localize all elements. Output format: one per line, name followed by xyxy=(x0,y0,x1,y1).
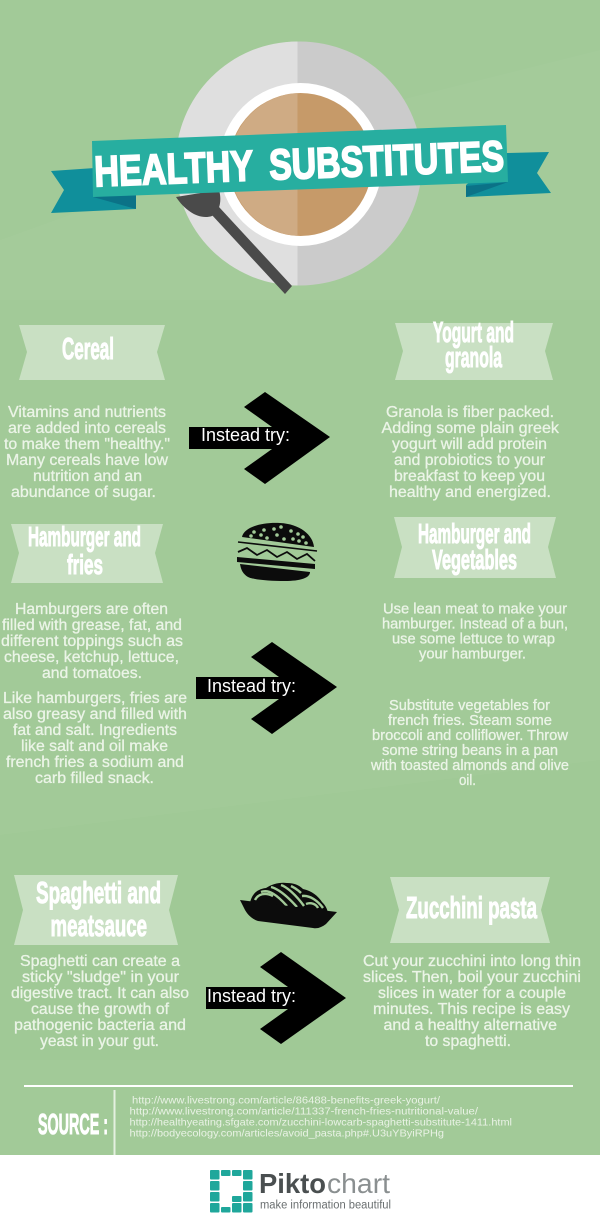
text: vegetables description: oil. xyxy=(459,773,476,789)
arrow 3 xyxy=(206,952,346,1044)
Piktochart logo xyxy=(210,1168,391,1212)
text: granola description: healthy and energized. xyxy=(389,484,551,501)
text: fries description xyxy=(3,690,187,787)
text: lean hamburger description: use some lettuce to wrap xyxy=(392,632,555,648)
source links: http://www.livestrong.com/article/111337-french-fries-nutritional-value/ xyxy=(130,1106,478,1118)
ribbon heading: Cereal xyxy=(19,325,165,380)
title: HEALTHY xyxy=(93,142,254,196)
logo wordmark: Pikto xyxy=(259,1168,326,1199)
text: spaghetti description xyxy=(11,953,189,1050)
text: hamburger description: filled with grease, fat, and xyxy=(2,617,182,634)
ribbon heading: Spaghetti and meatsauce: meatsauce xyxy=(50,908,147,943)
source links: http://healthyeating.sfgate.com/zucchini-lowcarb-spaghetti-substitute-1411.html xyxy=(130,1116,512,1128)
ribbon heading: Hamburger and fries: Hamburger and xyxy=(28,521,141,552)
source links: http://www.livestrong.com/article/86488-benefits-greek-yogurt/ xyxy=(132,1094,440,1106)
text: vegetables description: with toasted almonds and olive xyxy=(370,758,569,774)
text: fries description: like salt and oil make xyxy=(21,738,168,755)
text: zucchini description: slices. Then, boil your zucchini xyxy=(363,969,581,986)
text: vegetables description: some string beans in a pan xyxy=(382,743,558,759)
ribbon heading: Spaghetti and meatsauce xyxy=(14,875,178,945)
text: fries description: Like hamburgers, fries are xyxy=(3,690,187,707)
ribbon heading: Cereal: Cereal xyxy=(62,331,114,366)
text: lean hamburger description xyxy=(382,602,568,662)
text: hamburger description: different toppings such as xyxy=(1,633,183,650)
title: SUBSTITUTES xyxy=(268,133,505,190)
section: spaghetti and meatsauce xyxy=(11,875,189,1050)
text: lean hamburger description: your hamburger. xyxy=(419,646,526,662)
text: cereal description: Vitamins and nutrients xyxy=(8,404,166,421)
ribbon heading: Hamburger and fries xyxy=(11,521,163,583)
text: granola description: yogurt will add protein xyxy=(392,436,547,453)
text: spaghetti description: digestive tract. It can also xyxy=(11,985,189,1002)
text: cereal description: abundance of sugar. xyxy=(11,484,156,501)
source block xyxy=(24,1085,573,1155)
text: hamburger description: and tomatoes. xyxy=(42,665,142,682)
text: zucchini description: Cut your zucchini into long thin xyxy=(363,953,581,970)
text: zucchini description: slices in water for a couple xyxy=(378,985,566,1002)
text: hamburger description: Hamburgers are often xyxy=(15,601,168,618)
logo wordmark: chart xyxy=(327,1168,390,1199)
source links: http://bodyecology.com/articles/avoid_pasta.php#.U3uYByiRPHg xyxy=(130,1128,444,1140)
arrow 2: Instead try: xyxy=(207,676,296,696)
text: fries description: fat and salt. Ingredients xyxy=(13,722,177,739)
text: cereal description: nutrition and an xyxy=(33,468,142,485)
icon: spoon xyxy=(176,190,292,294)
section: zucchini pasta xyxy=(363,877,581,1050)
text: cereal description: to make them "healthy." xyxy=(4,436,170,453)
ribbon heading: Zucchini pasta xyxy=(390,877,550,943)
text: cereal description: Many cereals have low xyxy=(6,452,168,469)
arrow 2 xyxy=(196,642,337,734)
text: spaghetti description: Spaghetti can create a xyxy=(20,953,180,970)
text: granola description: Adding some plain greek xyxy=(382,420,560,437)
text: cereal description: are added into cereals xyxy=(8,420,166,437)
text: hamburger description: cheese, ketchup, lettuce, xyxy=(4,649,179,666)
text: lean hamburger description: Use lean meat to make your xyxy=(383,602,567,618)
arrow 1 xyxy=(189,392,330,484)
icon: hamburger xyxy=(237,523,317,581)
arrow 1: Instead try: xyxy=(201,425,290,445)
icon: pasta bowl xyxy=(240,883,337,928)
arrow 3: Instead try: xyxy=(207,986,296,1006)
text: granola description: and probiotics to your xyxy=(394,452,546,469)
text: vegetables description: french fries. Steam some xyxy=(388,713,552,729)
header: plate, spoon and title banner xyxy=(51,42,551,294)
text: vegetables description xyxy=(370,698,569,789)
ribbon heading: Yogurt and granola: Yogurt and xyxy=(433,317,514,349)
text: granola description: Granola is fiber packed. xyxy=(386,404,554,421)
text: fries description: also greasy and filled with xyxy=(3,706,187,723)
ribbon heading: Hamburger and fries: fries xyxy=(67,549,103,580)
section: hamburger and fries xyxy=(1,521,187,787)
section: cereal xyxy=(4,325,170,501)
text: fries description: french fries a sodium and xyxy=(6,754,184,771)
text: spaghetti description: sticky "sludge" in your xyxy=(22,969,180,986)
logo icon xyxy=(210,1170,252,1212)
text: lean hamburger description: hamburger. Instead of a bun, xyxy=(382,616,568,632)
text: spaghetti description: cause the growth of xyxy=(31,1001,170,1018)
logo wordmark xyxy=(259,1168,390,1199)
text: vegetables description: Substitute vegetables for xyxy=(389,698,550,714)
text: zucchini description: to spaghetti. xyxy=(425,1033,511,1050)
text: spaghetti description: yeast in your gut. xyxy=(40,1033,159,1050)
title banner ribbon xyxy=(51,125,551,213)
ribbon heading: Hamburger and Vegetables: Vegetables xyxy=(432,544,517,575)
ribbon heading: Spaghetti and meatsauce: Spaghetti and xyxy=(36,875,161,910)
source links xyxy=(130,1094,512,1140)
text: vegetables description: broccoli and colliflower. Throw xyxy=(372,728,569,744)
text: spaghetti description: pathogenic bacteria and xyxy=(14,1017,186,1034)
text: granola description xyxy=(382,404,560,501)
ribbon heading: Yogurt and granola: granola xyxy=(445,342,502,374)
section: hamburger and vegetables xyxy=(370,517,569,789)
text: granola description: breakfast to keep you xyxy=(394,468,545,485)
source block: SOURCE : xyxy=(38,1109,108,1141)
icon: plate xyxy=(176,42,422,286)
text: fries description: carb filled snack. xyxy=(35,770,154,787)
text: hamburger description xyxy=(1,601,183,682)
logo tagline: make information beautiful xyxy=(260,1200,391,1212)
text: zucchini description: minutes. This recipe is easy xyxy=(373,1001,570,1018)
text: cereal description xyxy=(4,404,170,501)
text: zucchini description xyxy=(363,953,581,1050)
ribbon heading: Hamburger and Vegetables xyxy=(394,517,556,578)
section: yogurt and granola xyxy=(382,317,560,501)
text: zucchini description: and a healthy alternative xyxy=(384,1017,557,1034)
ribbon heading: Yogurt and granola xyxy=(395,317,553,380)
title xyxy=(93,133,505,196)
